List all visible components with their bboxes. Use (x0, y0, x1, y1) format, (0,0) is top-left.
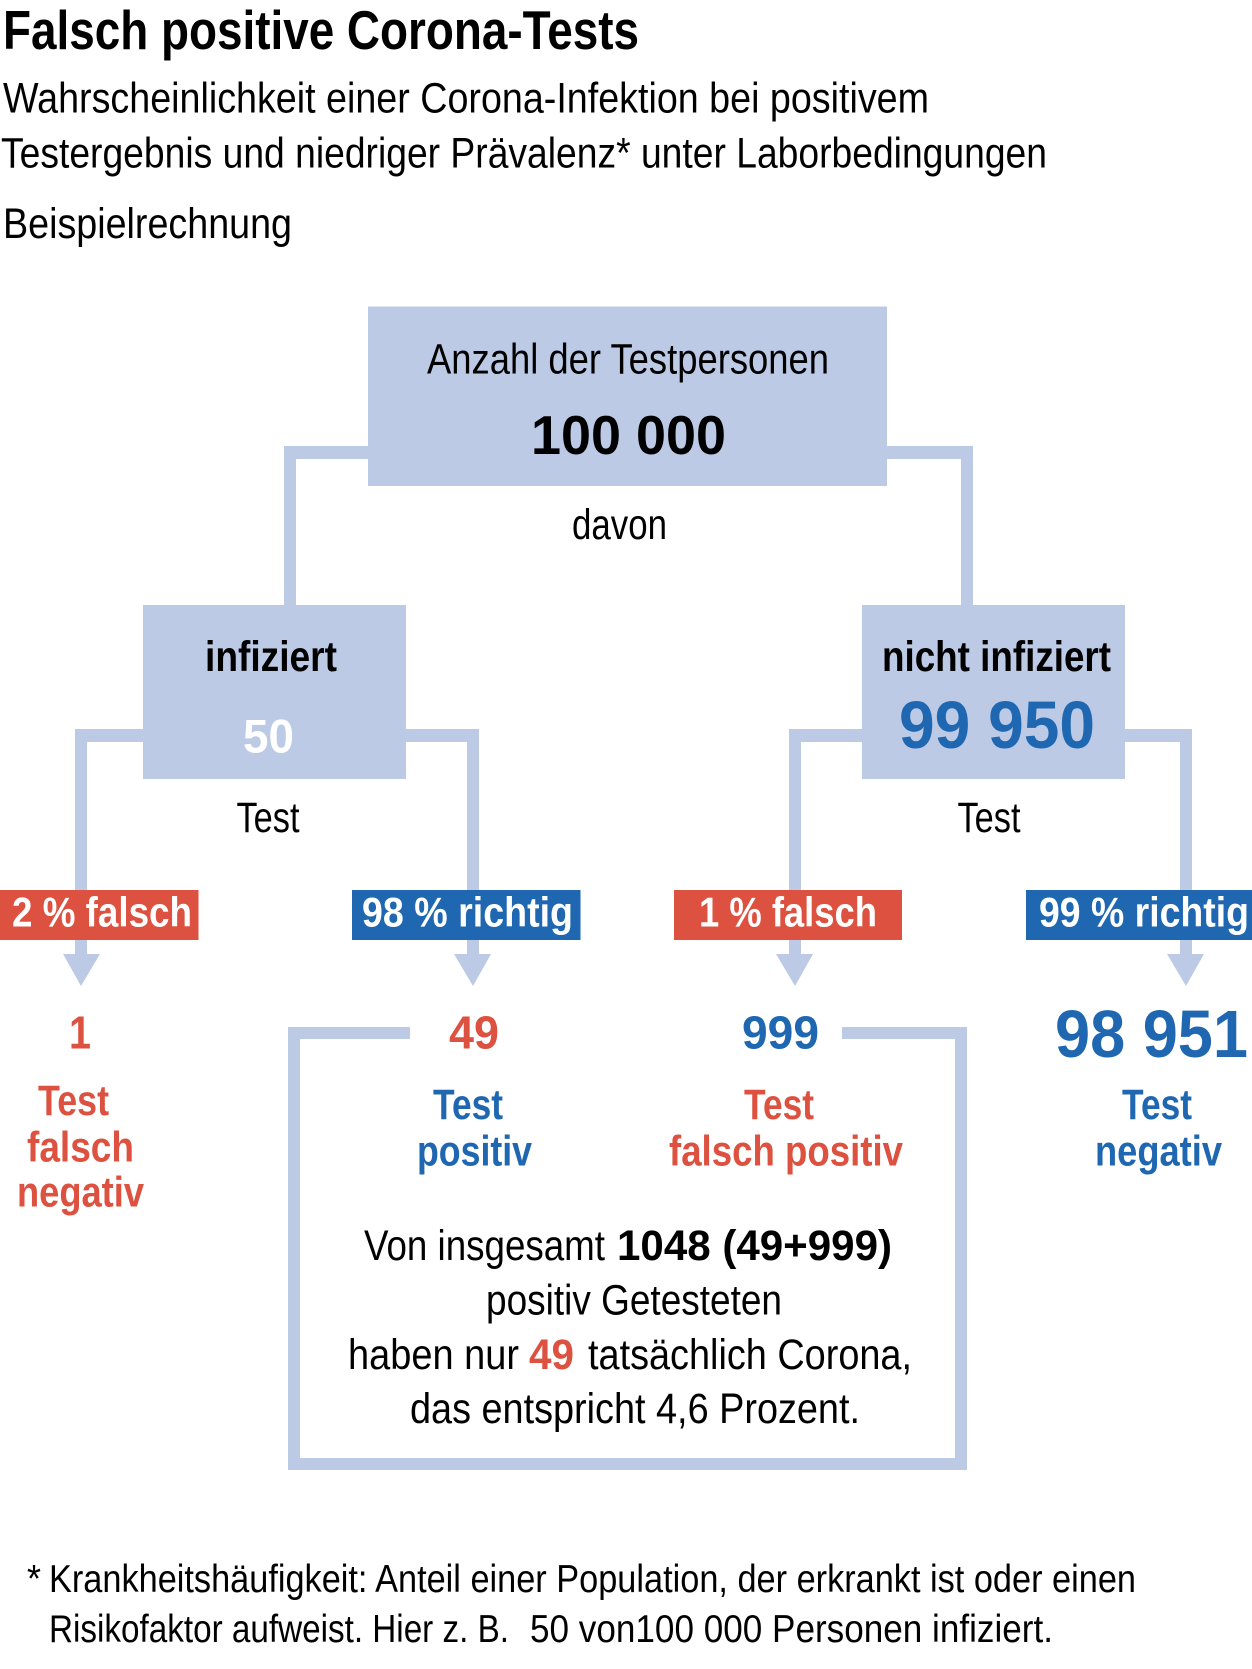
connector: infiziert to 2 % falsch (63, 729, 143, 986)
text: Test left: Test (236, 794, 300, 842)
text block: conclusion: das entspricht 4,6 Prozent. (410, 1385, 860, 1433)
result: 1 Test falsch negativ: Test (38, 1077, 109, 1125)
result: 98 951 Test negativ: Test (1122, 1081, 1192, 1129)
result: 1 Test falsch negativ: falsch (27, 1124, 134, 1172)
text block: conclusion: 49 (529, 1331, 574, 1379)
panel: total test persons (368, 306, 887, 486)
result: 999 Test falsch positiv: Test (744, 1081, 814, 1129)
subtitle (1, 74, 1047, 178)
result: 49 Test positiv: Test (433, 1081, 503, 1129)
text block: conclusion: tatsächlich Corona, (588, 1331, 912, 1379)
result: 999 Test falsch positiv: falsch positiv (669, 1128, 903, 1176)
result: 98 951 Test negativ (1055, 997, 1248, 1176)
footnote (27, 1558, 1136, 1651)
connector: top box to nicht infiziert (887, 446, 973, 606)
number: 100 000: 100 000 (531, 404, 726, 466)
text: Beispielrechnung: Beispielrechnung (3, 200, 292, 248)
result: 98 951 Test negativ: negativ (1095, 1128, 1222, 1176)
footnote: Krankheitshäufigkeit: Anteil einer Population, der erkrankt ist oder einen (49, 1558, 1136, 1601)
label: nicht infiziert: nicht infiziert (882, 633, 1111, 681)
text: Test right: Test (958, 794, 1021, 842)
footnote: Risikofaktor aufweist. Hier z. B. (49, 1608, 509, 1651)
subtitle: Testergebnis und niedriger Prävalenz* unter Laborbedingungen (1, 130, 1047, 178)
tag: 2 % falsch: 2 % falsch (12, 888, 192, 936)
result: 1 Test falsch negativ: 1 (69, 1006, 91, 1058)
connector: nicht infiziert to 99 % richtig (1125, 729, 1204, 986)
panel: infiziert (143, 605, 406, 779)
text: davon: davon (572, 501, 667, 549)
connector: nicht infiziert to 1 % falsch (776, 729, 862, 986)
number: 50: 50 (243, 710, 294, 762)
text block: conclusion: positiv Getesteten (486, 1276, 782, 1324)
number: 99 950: 99 950 (899, 688, 1095, 763)
footnote: * (27, 1558, 41, 1601)
result: 49 Test positiv: 49 (449, 1006, 499, 1058)
tag: 98 % richtig: 98 % richtig (362, 888, 573, 936)
result: 999 Test falsch positiv (669, 1006, 903, 1176)
panel: nicht infiziert (862, 605, 1125, 779)
result bracket: positive results (288, 1027, 967, 1470)
label: Anzahl der Testpersonen: Anzahl der Testpersonen (427, 336, 829, 384)
text block: conclusion: haben nur (348, 1331, 519, 1379)
connector: top box to infiziert (284, 446, 368, 606)
result: 1 Test falsch negativ: negativ (17, 1168, 144, 1216)
footnote: 50 von100 000 Personen infiziert. (530, 1608, 1053, 1651)
result: 49 Test positiv (417, 1006, 532, 1176)
subtitle: Wahrscheinlichkeit einer Corona-Infektion bei positivem (3, 74, 929, 122)
tag: 1 % falsch: 1 % falsch (699, 888, 877, 936)
text block: conclusion: 1048 (49+999) (617, 1222, 892, 1270)
result: 999 Test falsch positiv: 999 (742, 1006, 819, 1058)
text block: conclusion (348, 1222, 912, 1433)
label: infiziert: infiziert (205, 633, 337, 681)
result: 1 Test falsch negativ (17, 1006, 144, 1216)
result: 49 Test positiv: positiv (417, 1128, 532, 1176)
connector: infiziert to 98 % richtig (405, 729, 491, 986)
text block: conclusion: Von insgesamt (364, 1222, 605, 1270)
title: Falsch positive Corona-Tests (3, 0, 639, 61)
